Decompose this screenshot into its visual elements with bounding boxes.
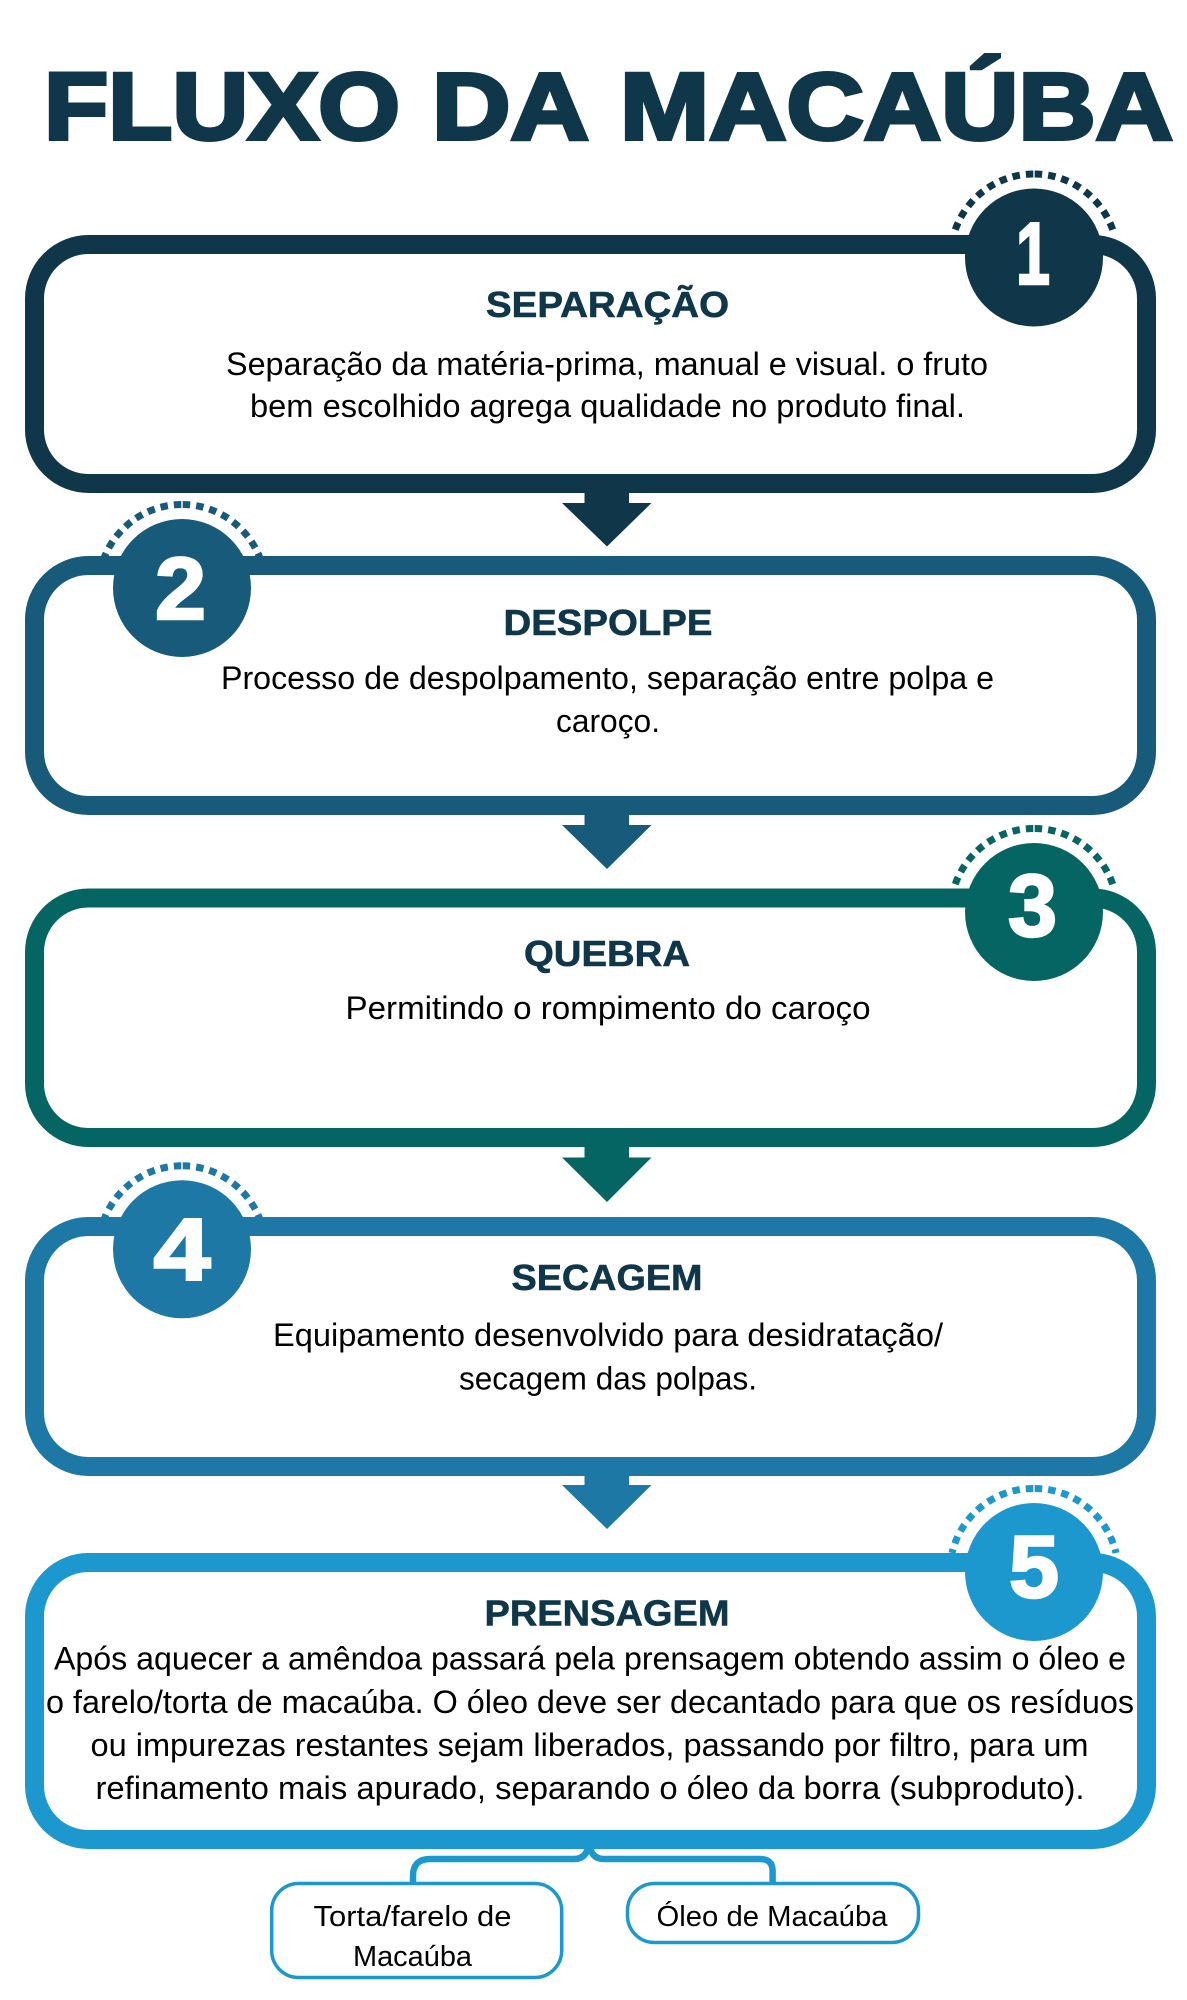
text: prensagem description: ou impurezas restantes sejam liberados, passando por filtro, para um <box>90 1727 1088 1763</box>
text: secagem description: secagem das polpas. <box>459 1360 757 1396</box>
text: prensagem description: o farelo/torta de macaúba. O óleo deve ser decantado para que os resíduos <box>46 1684 1134 1720</box>
text: secagem description: Equipamento desenvolvido para desidratação/ <box>273 1317 943 1353</box>
panel: step 1 separação <box>34 174 1146 484</box>
number badge: 2: 2 <box>155 539 206 638</box>
number badge: 4 <box>113 1180 251 1318</box>
heading: separação: SEPARAÇÃO <box>486 283 729 325</box>
title: MACAÚBA <box>620 54 1173 160</box>
title: FLUXO <box>44 54 400 160</box>
text: separação description: bem escolhido agrega qualidade no produto final. <box>250 388 965 424</box>
box frame: step 2 <box>34 566 1146 806</box>
brace connector <box>413 1848 773 1882</box>
number badge: 1: 1 <box>1016 204 1050 303</box>
number badge: 3: 3 <box>1008 856 1057 955</box>
title: DA <box>432 54 589 160</box>
text: secagem description <box>273 1317 943 1396</box>
text: separação description: Separação da matéria-prima, manual e visual. o fruto <box>226 346 988 382</box>
number badge: 2 <box>113 519 251 657</box>
dotted arc: step 2 <box>103 504 261 562</box>
output box: óleo de macaúba: Óleo de Macaúba <box>656 1900 888 1933</box>
text: prensagem description <box>46 1640 1134 1806</box>
output box: torta/farelo de macaúba: Macaúba <box>353 1941 473 1973</box>
heading: prensagem: PRENSAGEM <box>484 1592 730 1634</box>
heading: despolpe: DESPOLPE <box>504 602 712 643</box>
arrow: step 2 to 3 <box>562 815 652 869</box>
text: quebra description: Permitindo o rompimento do caroço <box>346 990 870 1026</box>
arrow: step 1 to 2 <box>562 493 652 546</box>
panel: step 5 prensagem <box>34 1488 1146 1840</box>
arrow: step 3 to 4 <box>562 1147 652 1202</box>
box frame: step 4 <box>34 1226 1146 1466</box>
panel: step 2 despolpe <box>34 504 1146 806</box>
text: prensagem description: Após aquecer a amêndoa passará pela prensagem obtendo assim o óleo e <box>54 1640 1126 1676</box>
text: despolpe description: Processo de despolpamento, separação entre polpa e <box>221 660 994 696</box>
heading: secagem: SECAGEM <box>512 1257 702 1298</box>
number badge: 5: 5 <box>1009 1517 1059 1616</box>
text: despolpe description <box>221 660 994 739</box>
box frame: step 5 <box>34 1562 1146 1840</box>
output box: torta/farelo de macaúba <box>272 1884 562 1978</box>
number badge: 1 <box>965 188 1103 326</box>
heading: quebra: QUEBRA <box>524 933 690 974</box>
dotted arc: step 4 <box>103 1166 261 1224</box>
text: prensagem description: refinamento mais apurado, separando o óleo da borra (subproduto). <box>96 1770 1084 1806</box>
box frame: step 1 <box>34 244 1146 484</box>
number badge: 4: 4 <box>154 1200 211 1299</box>
number badge: 5 <box>965 1503 1103 1641</box>
text: separação description <box>226 346 988 424</box>
arrow: step 4 to 5 <box>562 1476 652 1529</box>
number badge: 3 <box>965 843 1103 981</box>
dotted arc: step 5 <box>952 1488 1116 1553</box>
output box: óleo de macaúba <box>628 1884 918 1942</box>
dotted arc: step 3 <box>955 828 1113 886</box>
text: despolpe description: caroço. <box>556 703 660 739</box>
title <box>44 54 1173 160</box>
box frame: step 3 <box>34 898 1146 1138</box>
dotted arc: step 1 <box>955 174 1113 232</box>
panel: step 3 quebra <box>34 828 1146 1138</box>
output box: torta/farelo de macaúba: Torta/farelo de <box>314 1901 512 1933</box>
panel: step 4 secagem <box>34 1166 1146 1466</box>
